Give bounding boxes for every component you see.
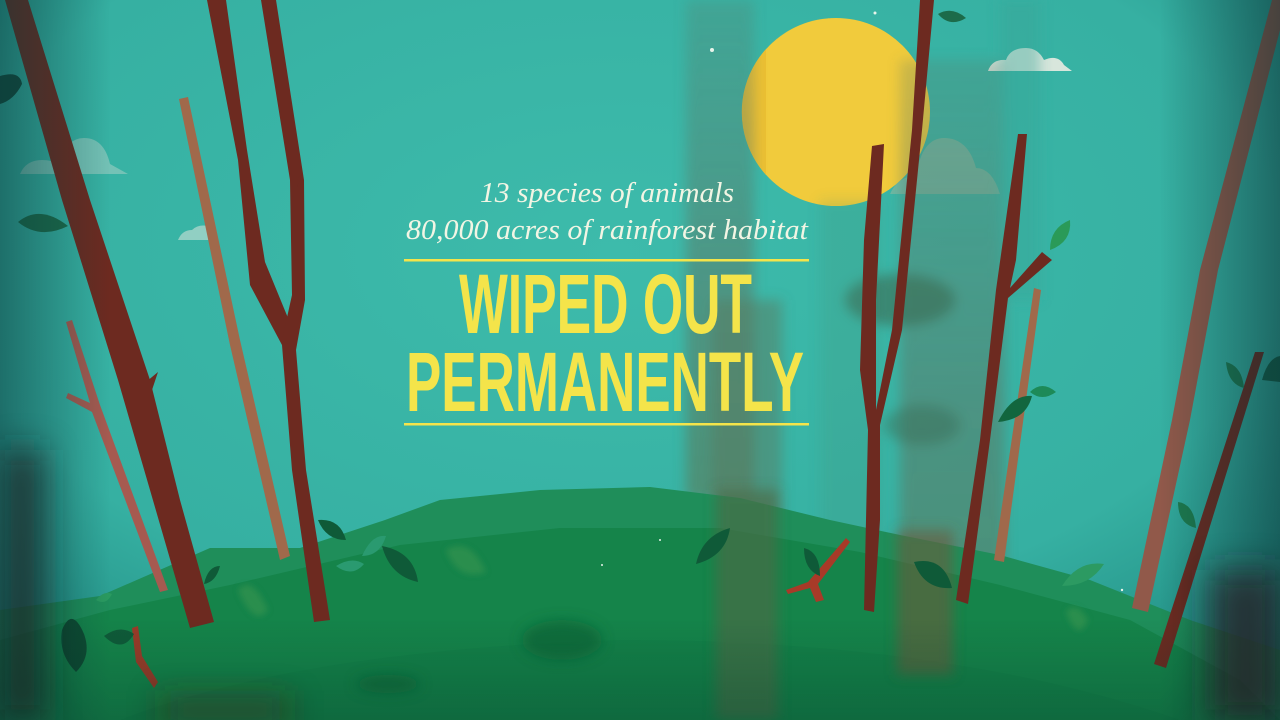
pale branch right: [994, 288, 1041, 562]
hill back: [0, 487, 1280, 720]
subtitle text: 80,000 acres of rainforest habitat: [406, 214, 809, 246]
clouds: [20, 48, 1072, 240]
hill foreground: [120, 640, 1180, 720]
title line 2: PERMANENTLY: [406, 335, 804, 429]
tree: forked left trunk, right limb: [261, 0, 305, 350]
sparkles: [601, 12, 1123, 591]
title block: [404, 257, 809, 429]
tree: tall forked trunk: [860, 0, 934, 612]
blurred foreground trunks: [686, 0, 1040, 720]
subtitle text: 13 species of animals: [480, 177, 734, 209]
far-right pale trunk: [1132, 0, 1280, 612]
tree: large left trunk: [5, 0, 214, 628]
sun: [742, 18, 930, 206]
small red twig: [786, 538, 850, 602]
dark branches left: [5, 0, 330, 628]
subtitle text: [406, 177, 809, 246]
hill front: [0, 528, 1280, 720]
trunk shading over hill: [356, 490, 953, 720]
pale branch left: [179, 97, 290, 560]
tree: branching right trunk: [956, 134, 1052, 604]
tree: far-right slim trunk: [1154, 352, 1264, 668]
title line 1: WIPED OUT: [459, 257, 752, 351]
tree: forked left trunk, left limb: [207, 0, 330, 622]
thin branch far left: [66, 320, 168, 592]
small bottom-left twig: [132, 626, 158, 688]
